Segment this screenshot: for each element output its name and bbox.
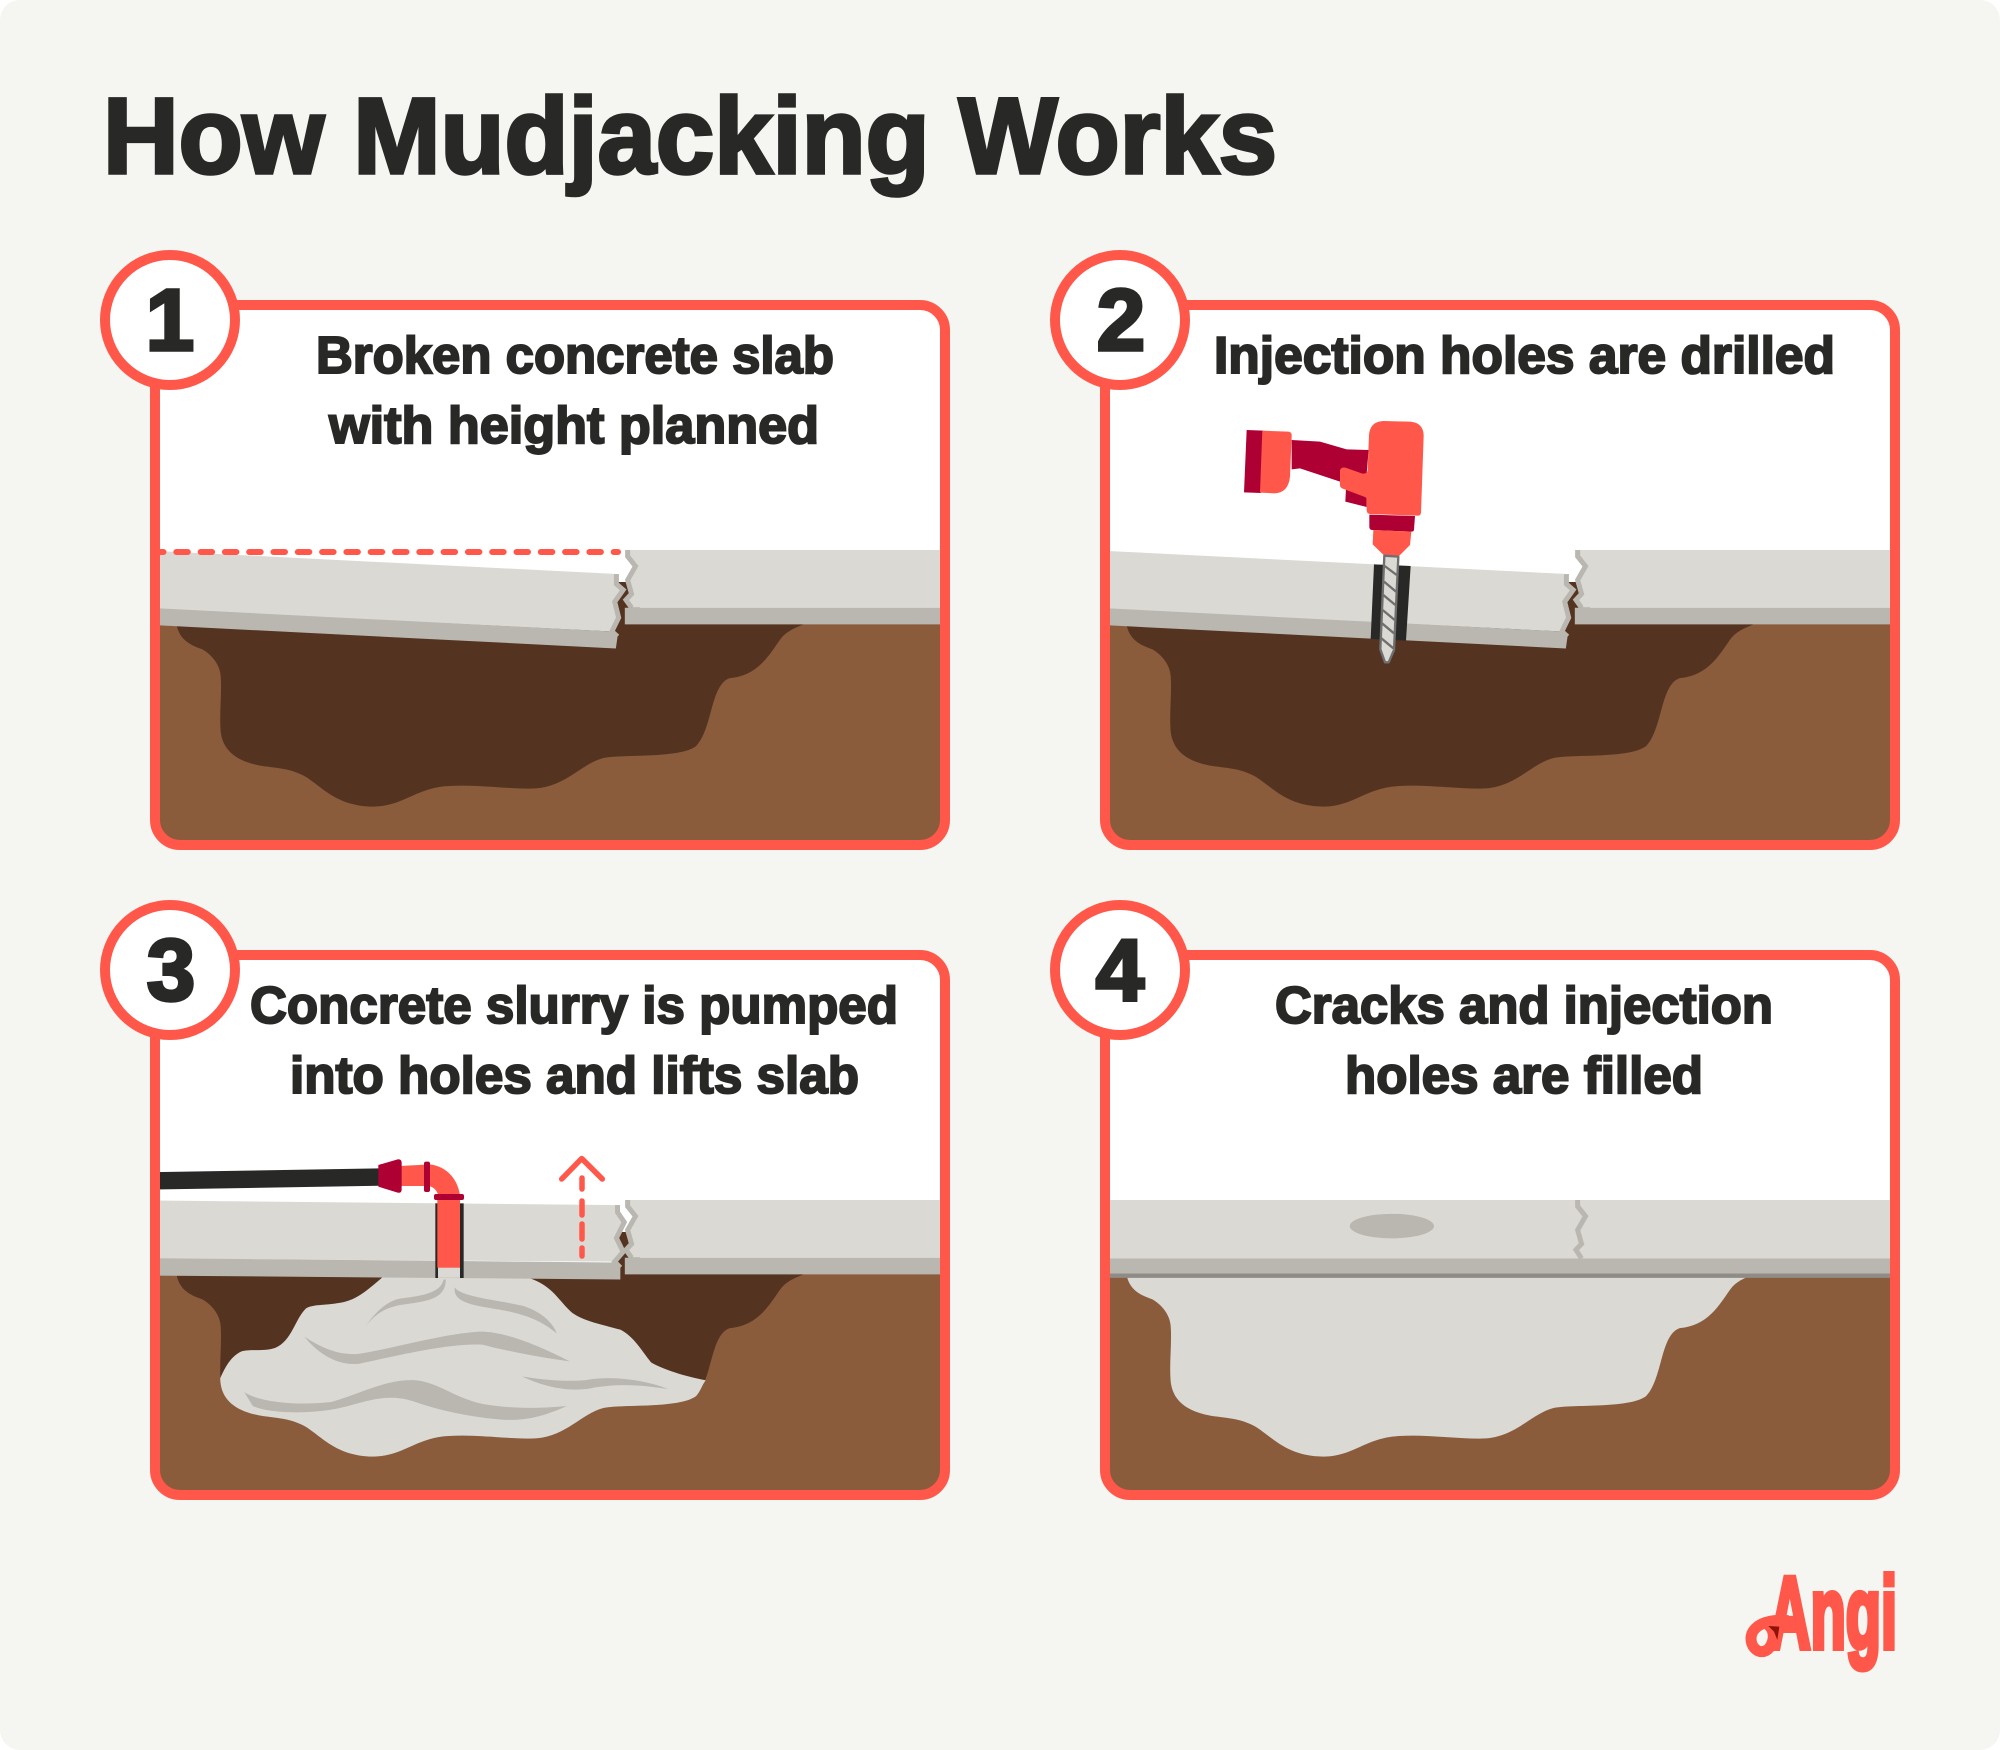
frame [155, 955, 945, 1495]
scene: ground, void and slab [1096, 550, 1904, 859]
planned height dashed line [152, 549, 618, 555]
number badge 1 [105, 255, 235, 385]
panel 2: holes drilled [1055, 255, 1904, 859]
scene: ground, void, slurry and slab [146, 1168, 954, 1509]
heading 3 [250, 977, 898, 1105]
frame [155, 305, 945, 845]
frame [1105, 305, 1895, 845]
scene: ground, filled void and repaired slab [1096, 1200, 1904, 1509]
number badge 2 [1055, 255, 1185, 385]
heading 3: Concrete slurry is pumped [250, 977, 898, 1035]
number badge 3: 3 [147, 922, 195, 1019]
heading 1: Broken concrete slab [316, 327, 834, 385]
heading 3: into holes and lifts slab [290, 1047, 859, 1105]
icon: drill and drilled hole [1244, 421, 1424, 662]
panel 4: filled [1055, 905, 1904, 1509]
panel 1: broken slab [105, 255, 954, 859]
scene: ground, void and slab [146, 550, 954, 859]
number badge 3 [105, 905, 235, 1035]
title: How Mudjacking Works [103, 75, 1277, 196]
number badge 2: 2 [1097, 272, 1145, 369]
icon: injection pipe [378, 1159, 464, 1278]
heading 4: holes are filled [1345, 1047, 1703, 1105]
frame [1105, 955, 1895, 1495]
panel 3: slurry pumped [105, 905, 954, 1509]
heading 4: Cracks and injection [1275, 977, 1773, 1035]
arrow: slab lifts [562, 1158, 602, 1256]
number badge 1: 1 [146, 272, 194, 369]
heading 1: with height planned [328, 397, 819, 455]
heading 4 [1275, 977, 1773, 1105]
heading 2: Injection holes are drilled [1214, 327, 1835, 385]
number badge 4 [1055, 905, 1185, 1035]
logo: Angi: Angi [1769, 1556, 1897, 1670]
number badge 4: 4 [1096, 922, 1144, 1019]
heading 1 [316, 327, 834, 455]
